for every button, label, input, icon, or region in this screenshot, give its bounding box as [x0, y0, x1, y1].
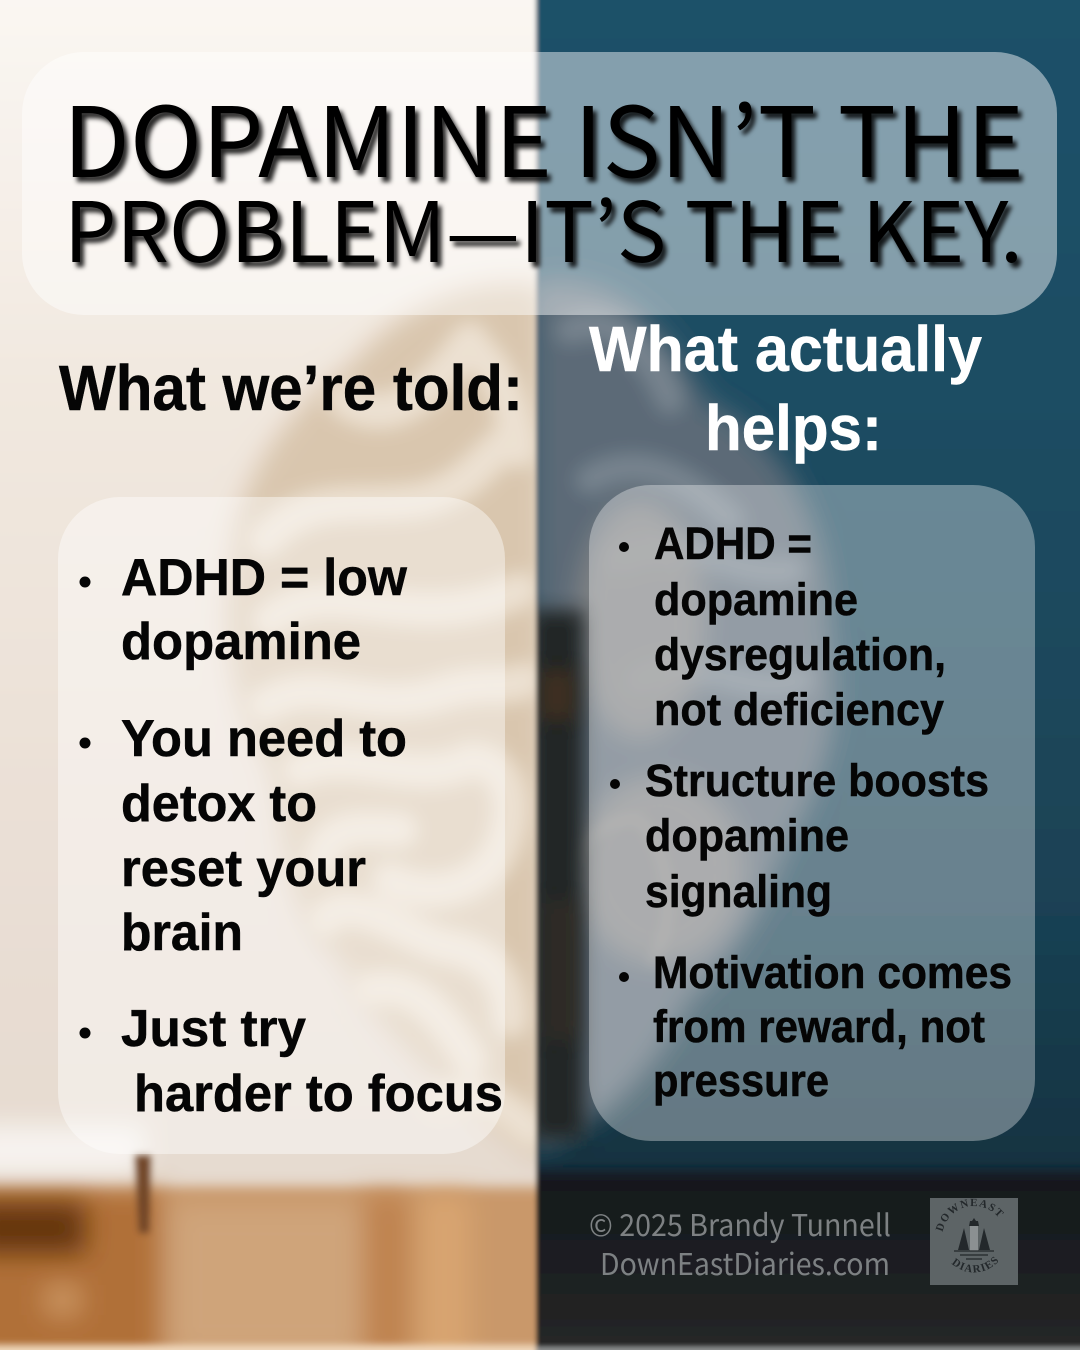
panel: what actually helps list: [589, 485, 1035, 1141]
left panel backing: [58, 497, 505, 1154]
footer credit: © 2025 Brandy Tunnell: [589, 1201, 891, 1245]
bullet: structure: Structure boosts: [645, 755, 989, 806]
bullet: motivation: [619, 947, 1012, 1106]
bullet: structure: signaling: [645, 866, 832, 917]
bullet: low dopamine: dopamine: [121, 613, 361, 671]
bullet: motivation: pressure: [653, 1055, 829, 1106]
floor: [520, 1172, 1080, 1350]
panel: title: [22, 52, 1057, 315]
heading: what we're told: What we’re told:: [59, 352, 523, 424]
bullet: motivation: Motivation comes: [653, 947, 1012, 998]
bullet: low dopamine: ADHD = low: [121, 549, 408, 607]
footer credit: DownEastDiaries.com: [600, 1240, 890, 1284]
right panel backing: [589, 485, 1035, 1141]
bullet: dysregulation: [619, 518, 946, 735]
bullet: detox: [80, 710, 407, 962]
bullet: detox: You need to: [121, 710, 407, 768]
panel: what we're told list: [58, 497, 505, 1154]
bullet: dysregulation: dopamine: [654, 574, 858, 625]
bullet: motivation: from reward, not: [653, 1001, 985, 1052]
title backing: [22, 52, 1057, 315]
heading: what actually helps: What actually: [589, 313, 982, 385]
icon: Downeast Diaries lighthouse logo: DOWNEAST: [936, 1198, 1004, 1232]
title line 2: PROBLEM—IT’S THE KEY.: [64, 166, 1023, 286]
bullet: dysregulation: dysregulation,: [654, 629, 946, 680]
title line 1: DOPAMINE ISN’T THE: [63, 64, 1024, 205]
heading: what actually helps: helps:: [705, 392, 882, 464]
bullet: structure: [610, 755, 989, 917]
heading: what actually helps: [589, 313, 982, 464]
icon: Downeast Diaries lighthouse logo: [930, 1198, 1018, 1285]
bullet: detox: brain: [121, 904, 243, 962]
bullet: try harder: harder to focus: [134, 1065, 503, 1123]
dark seam by the brain: [530, 610, 584, 1140]
bullet: dysregulation: not deficiency: [654, 684, 944, 735]
bullet: try harder: [80, 1000, 503, 1123]
bullet: detox: reset your: [121, 840, 366, 898]
bench: [0, 1125, 145, 1175]
bullet: low dopamine: [80, 549, 408, 671]
bullet: dysregulation: ADHD =: [654, 518, 812, 569]
left half: bright room: [0, 0, 560, 1350]
bullet: structure: dopamine: [645, 810, 849, 861]
icon: Downeast Diaries lighthouse logo: DIARIES: [952, 1256, 998, 1273]
right half: dark teal room: [520, 0, 1080, 1350]
footer credit: [589, 1201, 891, 1284]
floor: [0, 1187, 560, 1350]
bullet: try harder: Just try: [121, 1000, 306, 1058]
bullet: detox: detox to: [121, 775, 317, 833]
